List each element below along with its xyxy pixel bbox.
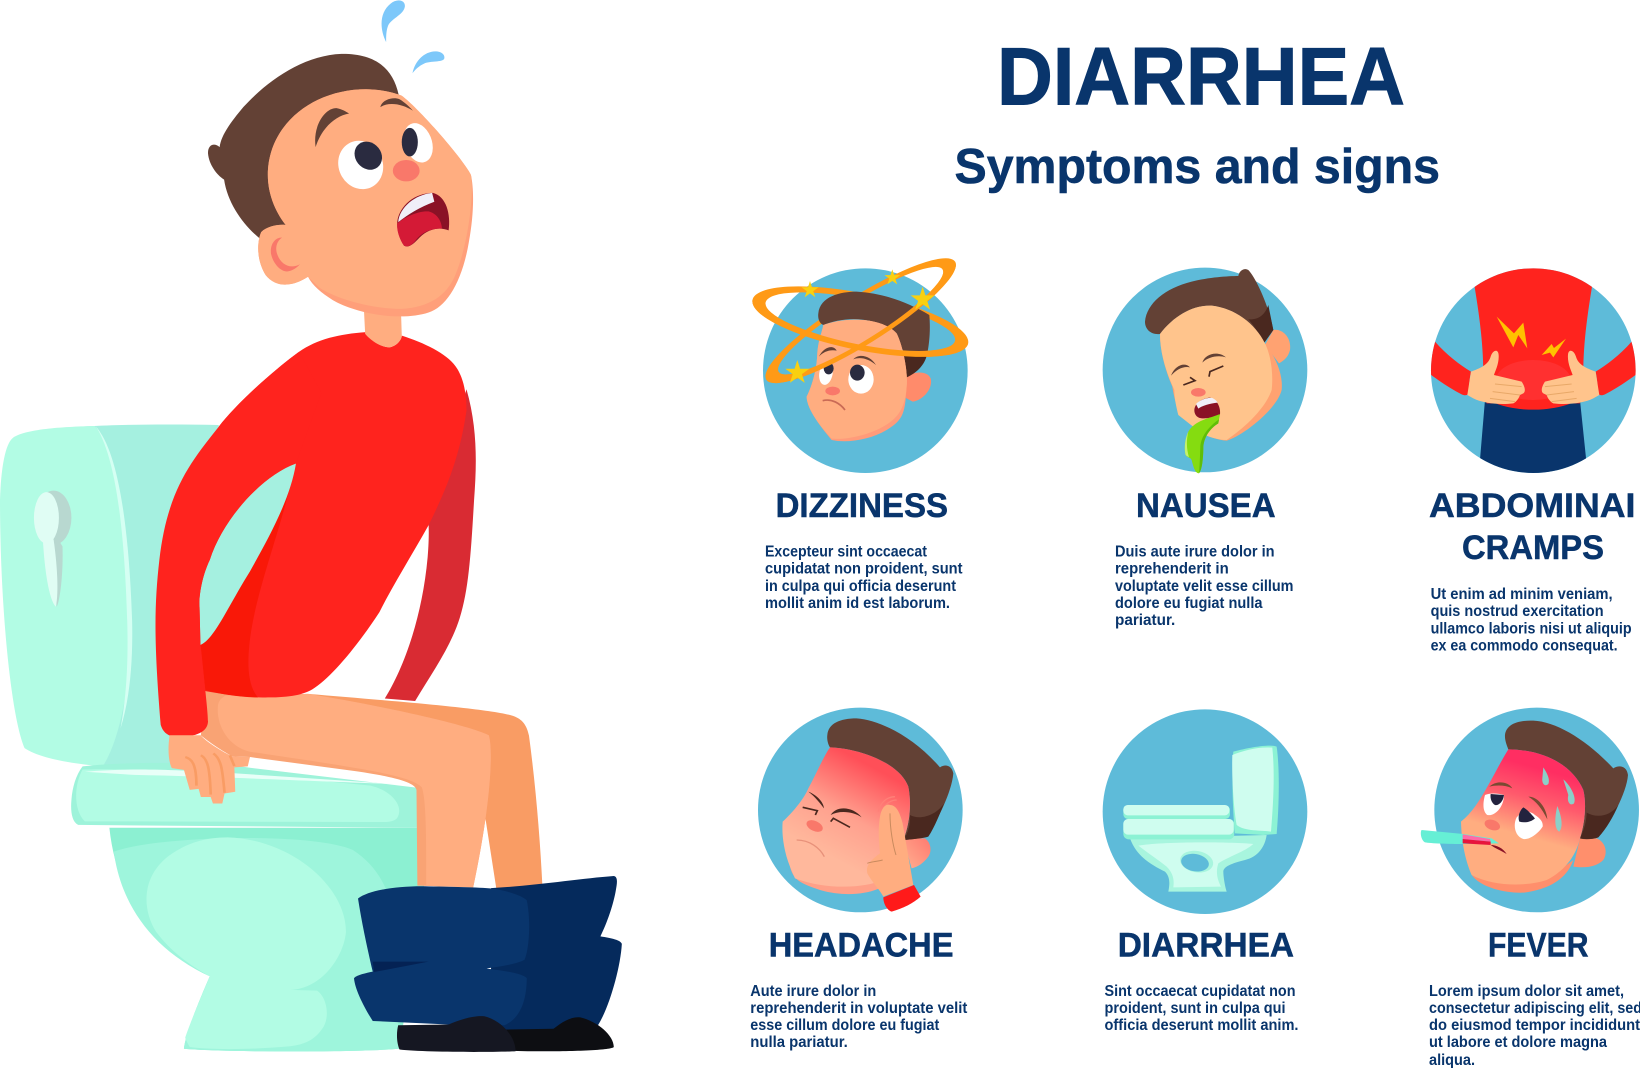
panel: abdominal cramps [1427,260,1640,654]
text: dizziness description: cupidatat non proident, sunt [765,561,962,578]
text: headache description: reprehenderit in voluptate velit [750,1000,967,1017]
text: abdominal cramps description: ex ea commodo consequat. [1431,638,1618,654]
icon: head with headache [758,708,963,912]
panel: diarrhea [1103,709,1307,1034]
text: abdominal cramps description [1431,586,1632,654]
text: headache description: Aute irure dolor in [750,983,876,1000]
gap between arm and torso [199,464,296,645]
illustration: man sitting on toilet [0,0,622,1052]
text: headache description: nulla pariatur. [750,1034,848,1051]
heading: diarrhea: DIARRHEA [1118,927,1294,965]
heading: fever: FEVER [1488,927,1588,965]
heading: dizziness: DIZZINESS [776,487,948,525]
text: nausea description: dolore eu fugiat nulla [1115,595,1263,612]
text: fever description: Lorem ipsum dolor sit amet, [1429,983,1624,1000]
text: fever description: ut labore et dolore magna [1429,1034,1607,1051]
icon: nauseous head [1103,268,1307,473]
text: diarrhea description: proident, sunt in culpa qui [1104,1000,1286,1017]
pants [354,876,622,1032]
text: diarrhea description: Sint occaecat cupidatat non [1104,983,1296,1000]
panel: headache [750,708,967,1051]
text: headache description: esse cillum dolore eu fugiat [750,1017,939,1034]
front arm [156,352,321,737]
text: nausea description: pariatur. [1115,612,1175,629]
shoes [397,1016,614,1052]
text: nausea description: Duis aute irure dolor in [1115,544,1275,561]
sweater torso [170,332,466,698]
text: abdominal cramps description: quis nostrud exercitation [1431,603,1604,620]
heading: headache: HEADACHE [769,927,954,965]
head [208,54,473,316]
hand [169,735,250,803]
icon: abdomen with hands [1430,268,1636,473]
text: dizziness description: in culpa qui officia deserunt [765,578,956,595]
text: nausea description [1115,544,1294,629]
panel: dizziness [747,241,974,612]
text: headache description [750,983,967,1051]
text: fever description [1429,983,1640,1068]
text: dizziness description [765,544,962,612]
text: diarrhea description [1104,983,1298,1034]
neck [364,307,402,347]
icon: dizzy head [752,258,968,473]
text: nausea description: reprehenderit in [1115,561,1229,578]
text: nausea description: voluptate velit esse cillum [1115,578,1294,595]
subtitle: Symptoms and signs [954,140,1440,194]
text: dizziness description: Excepteur sint occaecat [765,544,927,561]
heading: nausea: NAUSEA [1136,487,1276,525]
icon: head with thermometer [1421,708,1639,912]
panel: fever [1421,708,1640,1068]
heading: abdominal cramps: ABDOMINAI [1429,487,1636,525]
panel: nausea [1103,268,1307,629]
back arm [385,389,476,701]
title: DIARRHEA [997,32,1405,122]
legs [201,690,542,889]
icon: toilet [1103,709,1307,914]
text: dizziness description: mollit anim id est laborum. [765,595,950,612]
heading: abdominal cramps: CRAMPS [1462,529,1604,567]
toilet [0,425,429,1051]
text: abdominal cramps description: Ut enim ad minim veniam, [1431,586,1613,603]
heading: abdominal cramps [1429,487,1636,567]
sweat drops [382,0,444,73]
text: diarrhea description: officia deserunt mollit anim. [1104,1017,1298,1034]
